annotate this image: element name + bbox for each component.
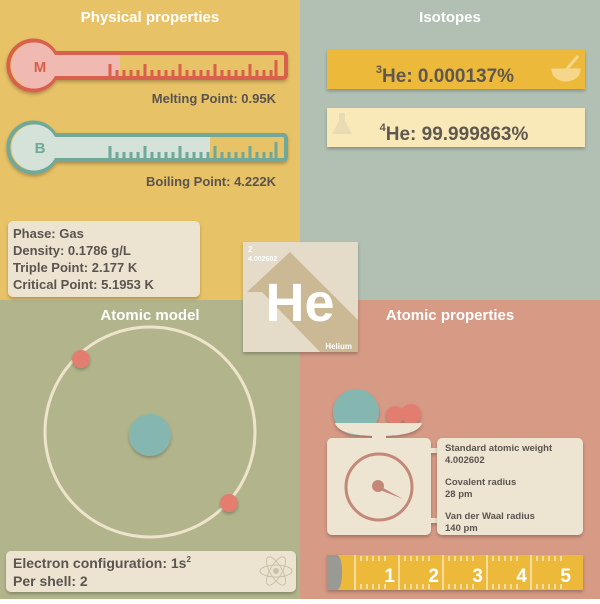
info card: atomic weight and radii: 4.002602 xyxy=(445,455,485,466)
title: atomic properties: Atomic properties xyxy=(386,307,514,324)
panel: physical properties background xyxy=(0,0,300,300)
info box: electron configuration: Per shell: 2 xyxy=(13,573,88,589)
thermometer: melting point: M xyxy=(34,59,46,76)
electron xyxy=(72,350,90,368)
electron xyxy=(220,494,238,512)
panel: isotopes background xyxy=(300,0,600,300)
ruler: 1 xyxy=(384,566,395,587)
info card: atomic weight and radii: Van der Waal radius xyxy=(445,511,535,522)
isotope bar: He-3: He: 0.000137% xyxy=(382,66,514,87)
element tile: helium: 2 xyxy=(248,245,253,254)
isotope bar: He-4: 4 xyxy=(380,122,387,134)
info card: atomic weight and radii: 140 pm xyxy=(445,523,478,534)
ruler: 4 xyxy=(516,566,527,587)
element tile: helium: 4.002602 xyxy=(248,256,277,263)
thermometer: boiling point: B xyxy=(35,140,46,157)
info card: atomic weight and radii: Standard atomic weight xyxy=(445,443,553,454)
info box: phase and density: Density: 0.1786 g/L xyxy=(13,243,131,258)
ruler: 3 xyxy=(472,566,483,587)
thermometer: boiling point xyxy=(8,122,286,172)
panel: atomic model background xyxy=(0,300,300,599)
info box: phase and density: Critical Point: 5.1953 K xyxy=(13,277,154,292)
label: melting point: Melting Point: 0.95K xyxy=(152,91,277,106)
nucleus xyxy=(129,414,171,456)
info card: atomic weight and radii: Covalent radius xyxy=(445,477,516,488)
info box: electron configuration: Electron configuration: 1s xyxy=(13,555,186,571)
info box: electron configuration xyxy=(6,551,296,592)
ruler: 5 xyxy=(560,566,571,587)
element tile: helium: He xyxy=(265,273,335,333)
isotope bar: He-3: 3 xyxy=(376,64,382,76)
element tile: helium: Helium xyxy=(325,342,352,351)
atomic model: orbit xyxy=(45,327,255,537)
info card: atomic weight and radii xyxy=(437,438,583,535)
thermometer: melting point xyxy=(8,40,286,90)
icon: scale xyxy=(327,389,437,535)
element tile: helium xyxy=(243,242,358,352)
isotope bar: He-3 xyxy=(327,50,585,89)
isotope bar: He-4 xyxy=(327,108,585,147)
info box: phase and density xyxy=(8,221,200,297)
isotope bar: He-4: He: 99.999863% xyxy=(386,124,528,145)
info box: phase and density: Phase: Gas xyxy=(13,226,84,241)
info card: atomic weight and radii: 28 pm xyxy=(445,489,472,500)
info box: electron configuration: 2 xyxy=(186,555,191,564)
ruler xyxy=(327,555,583,590)
title: physical properties: Physical properties xyxy=(81,9,219,26)
label: boiling point: Boiling Point: 4.222K xyxy=(146,174,277,189)
title: isotopes: Isotopes xyxy=(419,9,481,26)
panel: atomic properties background xyxy=(300,300,600,599)
info box: phase and density: Triple Point: 2.177 K xyxy=(13,260,138,275)
title: atomic model: Atomic model xyxy=(100,307,200,324)
ruler: 2 xyxy=(428,566,439,587)
